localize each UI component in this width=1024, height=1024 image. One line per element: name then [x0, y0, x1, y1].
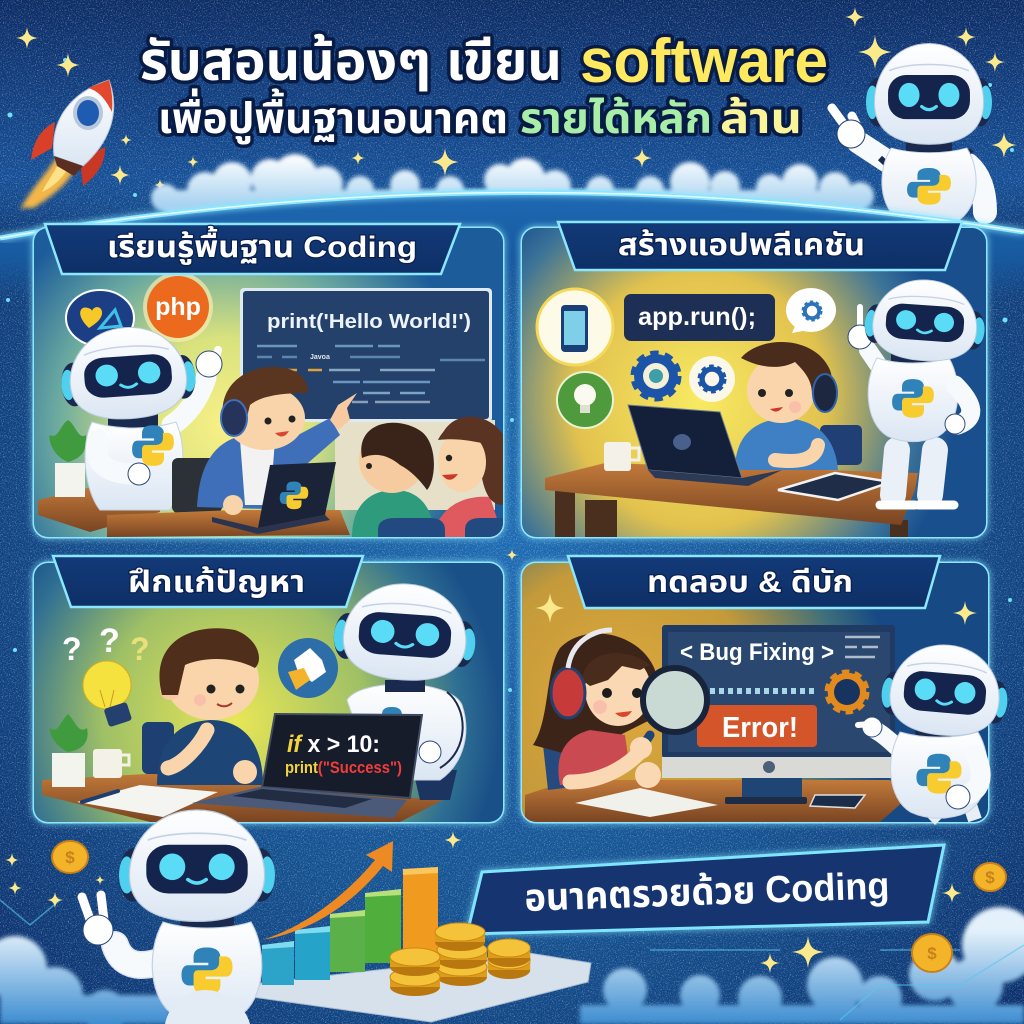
title: software	[580, 27, 828, 96]
monitor with hello world: Javoa	[310, 354, 330, 361]
icon: magnifying glass	[630, 668, 707, 759]
desk and plant	[38, 420, 160, 532]
header: learn coding basics	[45, 224, 460, 274]
code chip	[624, 294, 775, 341]
chairs	[378, 518, 503, 537]
laptop with code: if x > 10:	[287, 731, 380, 758]
icon: rocket	[20, 80, 114, 210]
coin stacks	[390, 923, 530, 996]
person: boy thinking	[142, 628, 263, 785]
icon: phone bubble	[537, 289, 613, 365]
person: girl with magnifier	[533, 630, 661, 790]
header: practice problem solving: ฝึกแก้ปัญหา	[128, 566, 305, 599]
icon: light bulb bubble	[557, 372, 613, 428]
coins floating: $	[985, 868, 995, 887]
robot: problem helper	[331, 579, 479, 800]
bubble: php	[143, 272, 213, 342]
robot: coding tutor	[58, 323, 222, 510]
circuit lines	[0, 900, 1024, 1020]
children	[352, 417, 514, 537]
title	[140, 27, 828, 144]
header: test and debug	[568, 556, 940, 608]
bottom clouds	[0, 907, 1024, 1024]
coins floating: $	[65, 848, 75, 867]
header: learn coding basics: เรียนรู้พื้นฐาน Coding	[107, 225, 417, 265]
monitor with hello world	[240, 288, 495, 510]
robot: debugger	[858, 640, 1012, 820]
laptop with python logo	[212, 462, 336, 534]
table	[545, 463, 918, 537]
clouds above horizon	[151, 154, 874, 216]
code chip: app.run();	[638, 303, 756, 331]
header: build applications: สร้างแอปพลีเคชัน	[618, 229, 865, 262]
monitor with bug fixing: < Bug Fixing >	[680, 639, 834, 666]
header: test and debug: ทดลอบ & ดีบัก	[647, 566, 853, 599]
coins floating: $	[927, 944, 937, 963]
header: build applications	[558, 222, 962, 270]
question marks: ?	[62, 631, 82, 667]
laptop with code	[192, 714, 422, 818]
tablet	[778, 473, 891, 500]
question marks: ?	[99, 622, 120, 660]
icon: speech bubble gear	[786, 288, 836, 333]
panel: test and debug	[522, 556, 1012, 822]
plant and cup	[50, 714, 129, 787]
bubble: php: php	[155, 293, 201, 321]
question marks: ?	[130, 631, 150, 667]
icon: gears	[634, 354, 735, 402]
panel: practice problem solving	[34, 556, 503, 822]
desk	[42, 772, 443, 822]
monitor with bug fixing: Error!	[722, 712, 798, 744]
icon: puzzle bubble	[278, 638, 338, 698]
header: practice problem solving	[53, 556, 363, 607]
laptop	[628, 405, 782, 486]
robot: app builder	[848, 276, 988, 505]
sparkle stars lower	[8, 831, 962, 973]
title: ล้าน	[720, 95, 802, 143]
question marks	[64, 628, 148, 660]
monitor with bug fixing	[662, 625, 895, 804]
title: เพื่อปูพื้นฐานอนาคต	[158, 88, 508, 144]
desk	[525, 780, 905, 822]
papers and pen	[77, 785, 218, 817]
coins floating	[52, 841, 1006, 972]
table	[107, 510, 350, 537]
panel: learn coding basics	[34, 224, 514, 537]
bar chart with growth arrow	[262, 841, 438, 985]
person: boy with headset	[735, 342, 862, 470]
person: teacher	[172, 367, 357, 513]
platform	[252, 953, 591, 1022]
banner: future wealth with coding: อนาคตรวยด้วย Coding	[524, 865, 890, 920]
panel: build applications	[522, 222, 988, 537]
banner: future wealth with coding	[467, 845, 944, 934]
bubble: language logos	[66, 290, 134, 346]
laptop with code: print("Success")	[285, 758, 402, 777]
icon: light bulb	[83, 661, 132, 727]
robot: top right	[832, 44, 992, 227]
title: รับสอนน้องๆ เขียน	[140, 32, 562, 92]
coffee cup	[604, 442, 639, 471]
monitor with hello world: print('Hello World!')	[267, 311, 471, 333]
title: รายได้หลัก	[520, 95, 712, 143]
papers and phone	[575, 788, 865, 817]
horizon glow arc	[0, 192, 1024, 300]
robot: bottom left	[82, 810, 275, 1024]
